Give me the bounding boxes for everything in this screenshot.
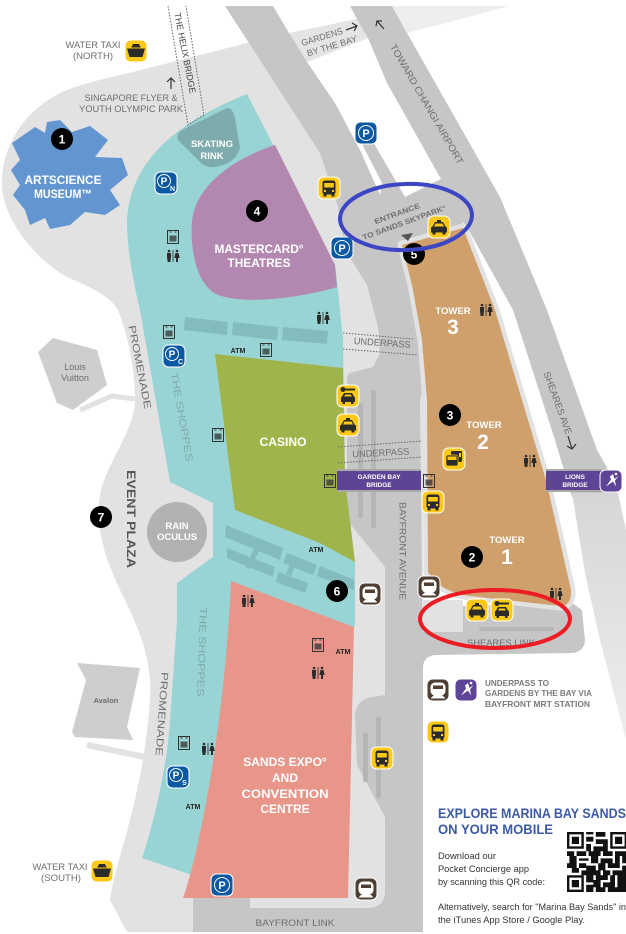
valet icons <box>337 385 513 621</box>
walkway labels: SHEARES AVE <box>541 370 574 436</box>
walkway labels: BY THE BAY <box>306 34 358 58</box>
panel: hotel towers: 1 <box>501 546 513 569</box>
walkway labels: EVENT PLAZA <box>124 470 138 568</box>
number markers: 3 <box>447 408 454 422</box>
rain oculus: OCULUS <box>157 532 197 543</box>
underpass north <box>343 333 418 355</box>
taxi icons <box>337 216 488 621</box>
panel: hotel towers: TOWER <box>489 535 525 546</box>
text: download instructions: Pocket Concierge app <box>438 864 529 875</box>
panel: casino: CASINO <box>260 435 306 449</box>
walkway labels: GARDENS <box>300 26 344 48</box>
artscience museum <box>11 120 128 229</box>
walkway labels: PROMENADE <box>153 672 169 757</box>
legend: underpass to gardens by the bay: BAYFRONT MRT STATION <box>485 699 590 709</box>
panel: sands expo and convention centre: CONVENTION <box>242 787 328 801</box>
garden bay bridge <box>337 469 421 492</box>
louis vuitton <box>38 338 135 410</box>
promenade and walkway base <box>2 37 423 932</box>
panel: mastercard theatres <box>192 145 337 300</box>
walking route icons <box>455 470 622 701</box>
mrt icons <box>355 576 449 900</box>
blue highlight ellipse <box>339 182 473 252</box>
walkway labels: YOUTH OLYMPIC PARK <box>79 104 183 114</box>
atm labels: ATM <box>186 804 200 811</box>
helix bridge <box>168 6 204 125</box>
panel: sands expo and convention centre: SANDS EXPO° <box>243 755 327 769</box>
lions bridge: BRIDGE <box>562 482 588 489</box>
walkway labels: BAYFRONT AVENUE <box>396 502 408 600</box>
walkway bars <box>184 317 354 593</box>
parking icons: P <box>218 880 226 892</box>
parking icons: N <box>170 186 175 193</box>
lions bridge: LIONS <box>565 474 586 481</box>
arrows <box>167 21 576 449</box>
number markers: 6 <box>334 584 341 598</box>
gardens by the bay walkway <box>289 19 368 62</box>
number markers: 2 <box>469 550 476 564</box>
walkway labels: (SOUTH) <box>41 873 81 883</box>
road network <box>193 6 618 932</box>
panel: sands expo and convention centre: CENTRE <box>260 802 310 816</box>
skating rink: RINK <box>200 151 224 162</box>
lift icons <box>164 230 434 750</box>
sheares avenue lower section <box>572 493 626 740</box>
number markers: 7 <box>98 510 105 524</box>
walkway labels: PROMENADE <box>126 324 153 410</box>
parking icons: P <box>338 243 346 255</box>
restroom icons <box>167 250 563 755</box>
atm labels: ATM <box>336 649 350 656</box>
road lane markings <box>358 390 554 798</box>
number markers: 5 <box>411 248 418 262</box>
rain oculus: RAIN <box>165 521 189 532</box>
underpass north: UNDERPASS <box>353 336 411 351</box>
underpass south <box>338 441 422 463</box>
panel: hotel towers: TOWER <box>435 306 471 317</box>
atm labels: ATM <box>231 348 245 355</box>
artscience museum: MUSEUM™ <box>34 187 92 201</box>
atm labels: ATM <box>309 547 323 554</box>
lions bridge <box>546 469 602 492</box>
water taxi icons <box>91 40 147 882</box>
legend: underpass to gardens by the bay <box>485 678 592 709</box>
panel: casino <box>215 354 355 562</box>
entrance to sands skypark label: TO SANDS SKYPARK° <box>361 203 447 242</box>
text: download instructions: the iTunes App Store / Google Play. <box>438 915 585 926</box>
entrance to sands skypark label: ENTRANCE <box>373 201 421 226</box>
walkway labels: THE SHOPPES <box>194 607 208 697</box>
garden bay bridge: BRIDGE <box>366 482 392 489</box>
panel: sands expo and convention centre: AND <box>272 771 298 785</box>
white ground above gardens walkway <box>273 6 357 33</box>
panel: hotel towers: 3 <box>447 316 459 339</box>
walkway labels: WATER TAXI <box>32 862 88 872</box>
skating rink: SKATING <box>191 139 233 150</box>
legend: underpass to gardens by the bay: UNDERPASS TO <box>485 678 549 688</box>
skating rink <box>178 108 240 167</box>
atm labels <box>186 348 350 811</box>
shuttle icon <box>443 448 465 470</box>
parking icons: C <box>178 359 183 366</box>
panel: sands expo and convention centre <box>183 581 354 898</box>
garden bay bridge: GARDEN BAY <box>357 474 401 481</box>
heading: explore marina bay sands: ON YOUR MOBILE <box>438 821 553 837</box>
parking icons: P <box>169 350 176 360</box>
underpass south: UNDERPASS <box>352 447 410 460</box>
text: download instructions <box>438 851 626 926</box>
artscience museum: ARTSCIENCE <box>24 173 102 187</box>
white ground between the roads <box>307 38 441 197</box>
parking icons: P <box>362 128 370 140</box>
avalon <box>72 663 145 757</box>
walkway east of changi road <box>392 6 510 33</box>
legend: underpass to gardens by the bay: GARDENS BY THE BAY VIA <box>485 688 592 698</box>
walkway labels: WATER TAXI <box>66 40 120 50</box>
helix bridge: THE HELIX BRIDGE <box>172 12 198 94</box>
number markers <box>51 128 483 602</box>
panel: the shoppes <box>127 94 355 877</box>
parking icons <box>155 122 377 896</box>
text: download instructions: Download our <box>438 851 496 862</box>
walkway labels: THE SHOPPES <box>168 372 194 463</box>
walkway labels: SHEARES LINK <box>467 638 536 649</box>
panel: mastercard theatres: MASTERCARD° <box>214 242 304 256</box>
walkway labels: TOWARD CHANGI AIRPORT <box>387 42 465 167</box>
walkway labels: (NORTH) <box>73 51 113 61</box>
panel: mastercard theatres: THEATRES <box>228 256 290 270</box>
panel: hotel towers: TOWER <box>466 420 502 431</box>
number markers: 1 <box>59 132 66 146</box>
red highlight ellipse <box>420 590 570 648</box>
panel: hotel towers: 2 <box>477 431 489 454</box>
bus icons <box>318 177 449 769</box>
light block beside sheares link <box>423 600 463 632</box>
walkway labels: BAYFRONT LINK <box>256 918 335 929</box>
parking icons: P <box>173 770 180 782</box>
parking icons: P <box>161 176 168 188</box>
panel: hotel towers <box>402 228 571 606</box>
number markers: 4 <box>254 204 261 218</box>
louis vuitton: Louis <box>64 362 86 372</box>
heading: explore marina bay sands <box>438 805 626 837</box>
walkway labels: SINGAPORE FLYER & <box>84 93 178 103</box>
text: download instructions: by scanning this QR code: <box>438 877 545 888</box>
louis vuitton: Vuitton <box>61 373 89 383</box>
rain oculus <box>147 502 207 562</box>
avalon: Avalon <box>94 696 119 705</box>
qr code <box>567 832 626 892</box>
parking icons: S <box>182 780 187 787</box>
